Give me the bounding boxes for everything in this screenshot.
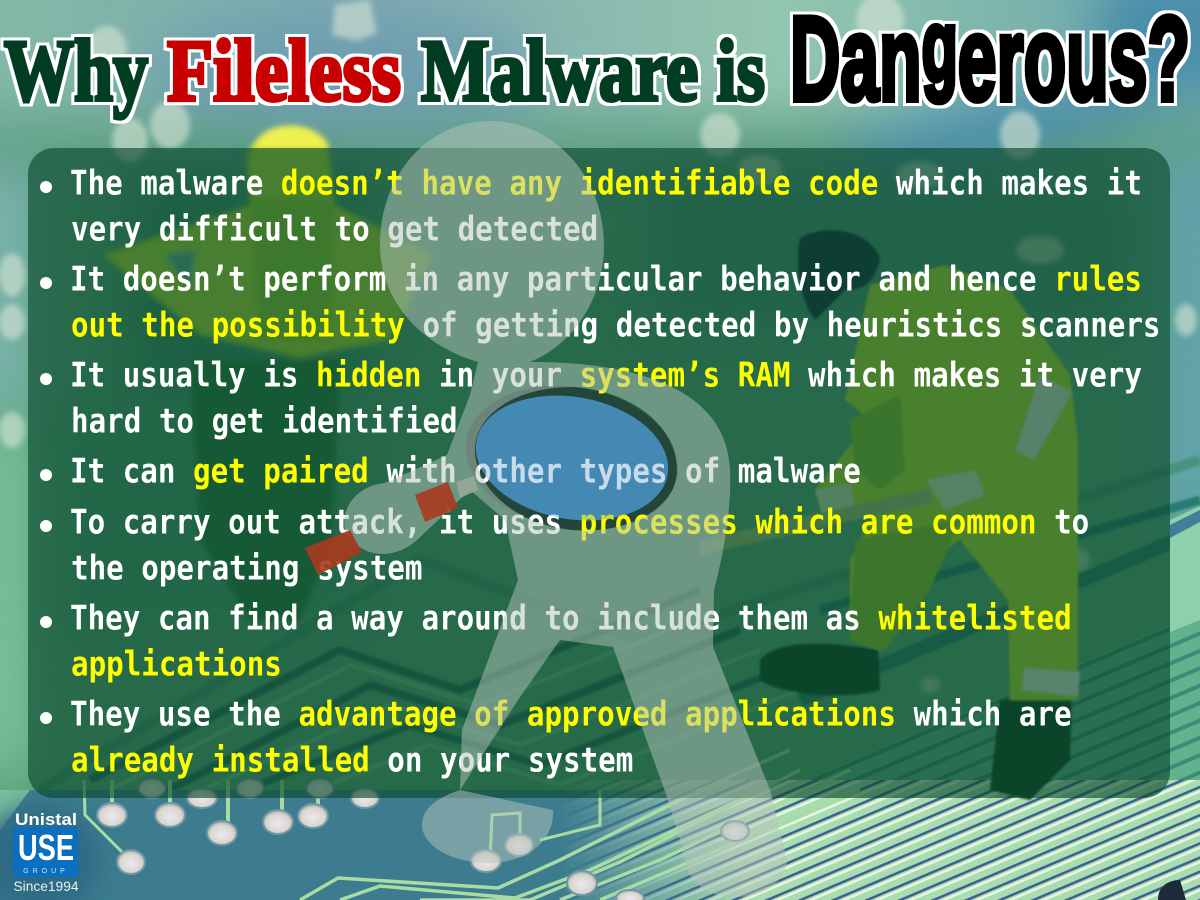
yellow-green worker figure <box>103 126 433 620</box>
line 10: They can find a way around to include them as whitelisted <box>70 598 1072 638</box>
line 11: applications <box>71 644 282 684</box>
green worker figure <box>700 230 1080 800</box>
line 7: It can get paired with other types of malware <box>70 451 861 491</box>
logo name: Unistal <box>15 810 77 829</box>
solder pads <box>97 778 749 900</box>
title word: Fileless: Fileless <box>167 23 401 120</box>
line 3: It doesn’t perform in any particular behavior and hence rules <box>70 259 1142 299</box>
line 12: They use the advantage of approved applications which are <box>70 694 1072 734</box>
line 8: To carry out attack, it uses processes which are common to <box>70 502 1089 542</box>
circuit traces behind panel <box>40 460 1200 800</box>
bullet 4 <box>40 469 52 481</box>
bullet 1 <box>40 181 52 193</box>
title <box>0 0 1191 126</box>
logo group word: GROUP <box>23 868 69 875</box>
title word: Why: Why <box>4 23 148 120</box>
magnifier handle <box>305 476 478 575</box>
logo: Unistal USE Group <box>13 810 79 894</box>
bright circuit traces <box>84 750 860 900</box>
bullet 3 <box>40 373 52 385</box>
line 6: hard to get identified <box>71 401 458 441</box>
circuit board base <box>0 790 1200 900</box>
line 2: very difficult to get detected <box>71 209 598 249</box>
logo since: Since1994 <box>14 878 79 894</box>
bullet 7 <box>40 712 52 724</box>
bokeh spots <box>0 0 1197 693</box>
line 9: the operating system <box>71 548 422 588</box>
magnifier lens glaze over the text <box>466 381 678 535</box>
bullet 6 <box>40 616 52 628</box>
line 4: out the possibility of getting detected by heuristics scanners <box>71 305 1160 345</box>
panel: reasons list <box>28 148 1170 798</box>
line 13: already installed on your system <box>71 740 633 780</box>
line 5: It usually is hidden in your system’s RAM which makes it very <box>70 355 1142 395</box>
title word: Malware is: Malware is <box>421 23 765 120</box>
logo blue square <box>13 827 78 877</box>
bullet 2 <box>40 277 52 289</box>
line 1: The malware doesn’t have any identifiable code which makes it <box>70 163 1142 203</box>
figure body <box>344 121 787 897</box>
bullet 5 <box>40 520 52 532</box>
